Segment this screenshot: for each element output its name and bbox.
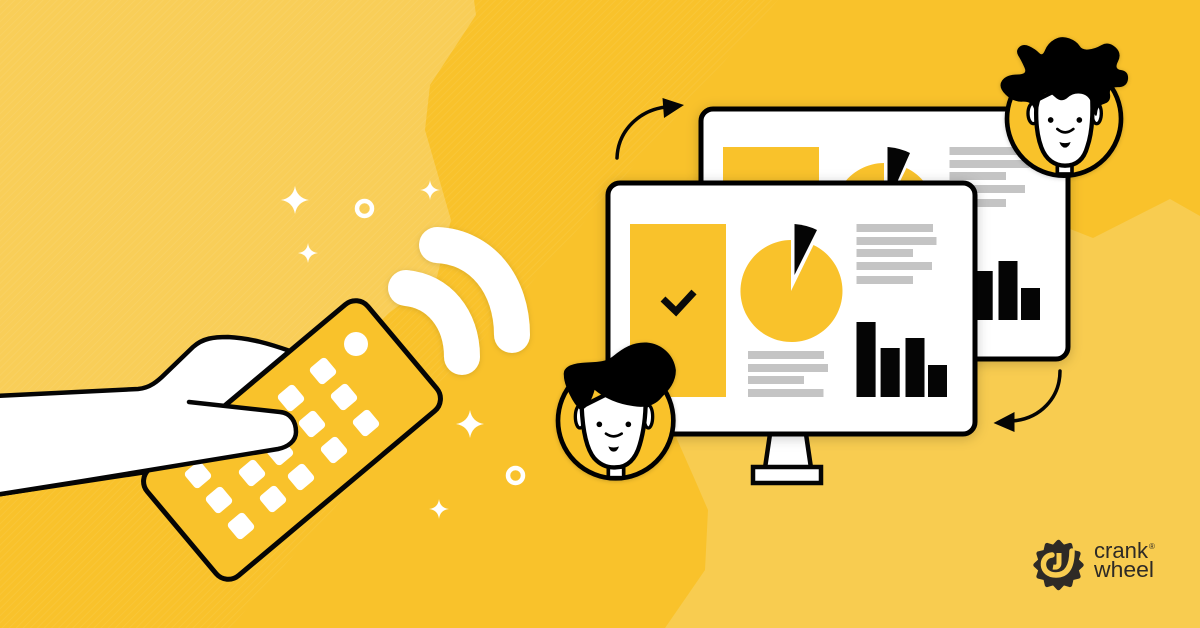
signal waves	[406, 245, 512, 357]
eyes	[596, 421, 631, 427]
back monitor content	[723, 147, 1040, 320]
mouth	[608, 446, 619, 452]
smile	[1057, 129, 1073, 132]
text lines lower	[748, 351, 828, 397]
remote body	[137, 294, 447, 586]
sparkles	[281, 180, 484, 519]
neck	[608, 467, 624, 478]
rotation arrow top	[617, 98, 684, 158]
yellow panel	[630, 224, 726, 397]
background: diagonal stripe band	[0, 0, 778, 628]
logo: crankwheel	[1036, 538, 1155, 588]
neck	[1057, 164, 1072, 174]
monitor base	[753, 467, 821, 483]
logo wordmark: crank	[1094, 538, 1149, 563]
logo: crankwheel: wheel	[1093, 557, 1154, 582]
ears	[575, 405, 653, 428]
hand and arm behind remote	[0, 337, 290, 495]
icon: check mark	[663, 292, 694, 312]
text lines upper	[856, 224, 936, 284]
background: light top-left shape	[0, 0, 476, 450]
avatar: quiff hair person	[558, 343, 675, 478]
back monitor	[701, 109, 1068, 359]
ears	[1028, 103, 1101, 124]
logo gear icon	[1036, 542, 1081, 588]
front monitor	[608, 183, 975, 434]
mouth	[1059, 142, 1071, 148]
avatar: curly hair person	[1001, 38, 1128, 176]
curly hair	[1001, 38, 1128, 115]
decorative rings	[357, 201, 523, 483]
front monitor screen	[608, 183, 975, 434]
quiff hair	[564, 343, 675, 410]
avatar circle	[1007, 62, 1121, 176]
hand thumb over remote	[0, 402, 296, 496]
face	[582, 392, 646, 467]
avatar circle	[558, 363, 673, 478]
smile	[606, 434, 622, 436]
eyes	[1048, 117, 1082, 123]
face	[1036, 87, 1092, 166]
remote control	[137, 294, 447, 586]
background: light bottom-right shape	[665, 199, 1200, 628]
remote power button	[344, 332, 368, 356]
logo registered mark: ®	[1149, 542, 1155, 551]
pie chart	[740, 224, 842, 342]
bar chart	[856, 322, 947, 397]
monitor stand	[765, 434, 811, 468]
remote buttons	[183, 356, 381, 541]
back monitor screen	[701, 109, 1068, 359]
rotation arrow bottom	[994, 371, 1060, 432]
